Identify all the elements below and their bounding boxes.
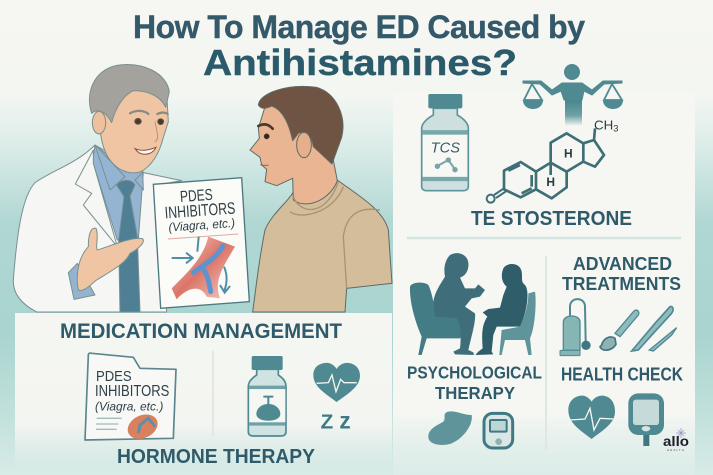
- icons in testosterone panel: [422, 94, 618, 203]
- left scale pan: [524, 84, 542, 100]
- pulse line: [317, 375, 357, 392]
- divider vertical: [545, 256, 547, 450]
- heading: advanced treatments: TREATMENTS: [562, 274, 681, 294]
- icons: kidney and monitor: [428, 411, 513, 448]
- title: Antihistamines?: [203, 42, 517, 83]
- icon: large glucose meter: [628, 393, 664, 446]
- vial cap: [428, 94, 462, 108]
- pump bulb: [581, 341, 591, 350]
- patient hair: [258, 86, 343, 164]
- injector shaft: [615, 310, 639, 337]
- icon: therapy silhouettes: [410, 253, 536, 355]
- heading: health check: HEALTH CHECK: [561, 364, 683, 384]
- icon: injector pen: [600, 310, 639, 350]
- doctor cuff: [68, 263, 95, 299]
- illustration: doctor and patient consultation: [13, 65, 392, 312]
- heading: advanced treatments: [562, 254, 681, 294]
- icon: applicator: [632, 307, 673, 351]
- folder text: INHIBITORS: [95, 383, 169, 400]
- monitor body: [484, 413, 513, 448]
- patient collar: [290, 182, 380, 288]
- panel: psychological therapy: [407, 253, 542, 448]
- meter screen: [633, 400, 659, 425]
- leaflet text: INHIBITORS: [164, 199, 236, 222]
- folder text: [95, 369, 169, 414]
- heading: hormone therapy: HORMONE THERAPY: [117, 446, 316, 468]
- heading: advanced treatments: ADVANCED: [573, 254, 672, 274]
- leaflet text: [163, 185, 238, 239]
- logo spark: [676, 428, 686, 438]
- chemical labels: H: [546, 175, 555, 189]
- bottle cap: [252, 356, 283, 370]
- folder lines: [96, 418, 122, 429]
- chemical structure: testosterone: [487, 128, 604, 203]
- vial molecule: [437, 160, 455, 169]
- doctor hand: [77, 228, 143, 291]
- vertical divider: [212, 351, 214, 436]
- chemical labels: H: [564, 146, 573, 160]
- left scale fill: [523, 100, 543, 109]
- icon: small glucose monitor: [484, 413, 513, 448]
- icon: heart with pulse large: [568, 396, 615, 439]
- meter body: [628, 393, 664, 435]
- doctor: [13, 65, 182, 312]
- icon: small applicator: [649, 328, 677, 351]
- icon: sleep Zz: Z: [321, 410, 334, 433]
- folder outline: [85, 353, 176, 440]
- bottle body: [248, 369, 286, 436]
- logo wordmark: allo: [663, 433, 689, 449]
- heading: psychological therapy: PSYCHOLOGICAL: [407, 362, 542, 382]
- doctor ear: [92, 111, 106, 134]
- chemical labels: 3: [613, 123, 618, 133]
- folder text: PDES: [96, 369, 132, 385]
- patient ear: [297, 132, 311, 158]
- bottle label: [249, 389, 285, 422]
- vial body: [422, 108, 468, 191]
- doctor neck and face: [99, 83, 168, 173]
- doctor lapel: [75, 150, 117, 247]
- icon: heart with pulse: [313, 363, 360, 402]
- folder artery vessel: [138, 418, 155, 433]
- doctor face details: [130, 111, 168, 154]
- panel: advanced treatments and health check: [560, 254, 683, 446]
- heading: testosterone: TE STOSTERONE: [471, 208, 632, 230]
- logo: allo health: [663, 428, 689, 452]
- doctor shirt: [93, 145, 143, 240]
- bottle symbol: [257, 397, 279, 420]
- icon: sleep Zz: z: [339, 407, 351, 433]
- icon: TCS vial: [422, 94, 468, 191]
- chemical labels: CH: [594, 117, 613, 132]
- heart shape: [313, 363, 360, 402]
- patient face details: [258, 124, 273, 165]
- title: How To Manage ED Caused by: [133, 9, 585, 45]
- pump tube: [570, 299, 586, 342]
- heading: medication management: MEDICATION MANAGEMENT: [60, 320, 342, 343]
- icon: vacuum pump: [560, 299, 591, 356]
- pulse line: [570, 408, 613, 430]
- panel: medication and hormone therapy: [15, 313, 392, 468]
- vial bands: [422, 132, 468, 179]
- carbonyl bond: [494, 188, 506, 198]
- right scale pan: [604, 84, 622, 100]
- monitor screen: [490, 420, 507, 432]
- heading: psychological therapy: THERAPY: [435, 383, 515, 403]
- injector head: [600, 337, 616, 350]
- patient shirt: [253, 180, 392, 312]
- icon: hormone balance scales: [523, 64, 623, 126]
- vial label: [423, 135, 467, 177]
- icons: heart and meter: [568, 393, 664, 446]
- patient figure: [475, 264, 528, 355]
- panel: testosterone: [422, 64, 632, 230]
- PDE5 leaflet: [153, 178, 249, 308]
- pump base: [560, 350, 580, 356]
- icons: treatment devices: [560, 299, 677, 356]
- bottle bands: [249, 387, 285, 424]
- icon: kidney shape: [428, 411, 472, 445]
- patient chair: [499, 292, 536, 355]
- doctor coat: [13, 145, 182, 312]
- therapist figure: [433, 253, 485, 355]
- meter strip: [643, 433, 649, 446]
- patient: [250, 86, 392, 312]
- folder text: (Viagra, etc.): [95, 400, 163, 414]
- icon: PDE5 folder document: [85, 353, 176, 444]
- doctor tie: [117, 180, 140, 312]
- doctor collar: [95, 145, 143, 190]
- leaflet text: PDES: [179, 187, 213, 206]
- chemical labels: [546, 117, 618, 189]
- divider horizontal: [407, 237, 681, 239]
- therapist chair: [410, 283, 463, 355]
- panel contents: [85, 353, 360, 444]
- meter button: [642, 426, 650, 431]
- balance head: [564, 64, 580, 80]
- pump cylinder: [563, 316, 580, 350]
- balance beam and figure: [523, 81, 622, 100]
- steroid rings: [504, 128, 604, 198]
- panel: right backdrop: [393, 92, 695, 475]
- logo subtitle: HEALTH: [667, 448, 684, 452]
- vial label text: TCS: [431, 141, 460, 157]
- balance column: [565, 100, 582, 126]
- heart shape: [568, 396, 615, 439]
- patient face: [250, 93, 337, 204]
- vial molecule atoms: [435, 157, 458, 172]
- panel backdrop: [15, 313, 392, 468]
- leaflet sheet: [153, 178, 249, 308]
- folder artery badge: [124, 410, 162, 444]
- doctor hair: [89, 65, 169, 123]
- icon: medicine bottle: [248, 356, 286, 436]
- right scale fill: [603, 100, 623, 109]
- heading: psychological therapy: [407, 362, 542, 403]
- carbonyl oxygen: [487, 195, 495, 203]
- monitor button: [495, 438, 502, 445]
- artery diagram: [172, 237, 235, 299]
- title: [133, 9, 585, 83]
- leaflet text: (Viagra, etc.): [168, 216, 235, 235]
